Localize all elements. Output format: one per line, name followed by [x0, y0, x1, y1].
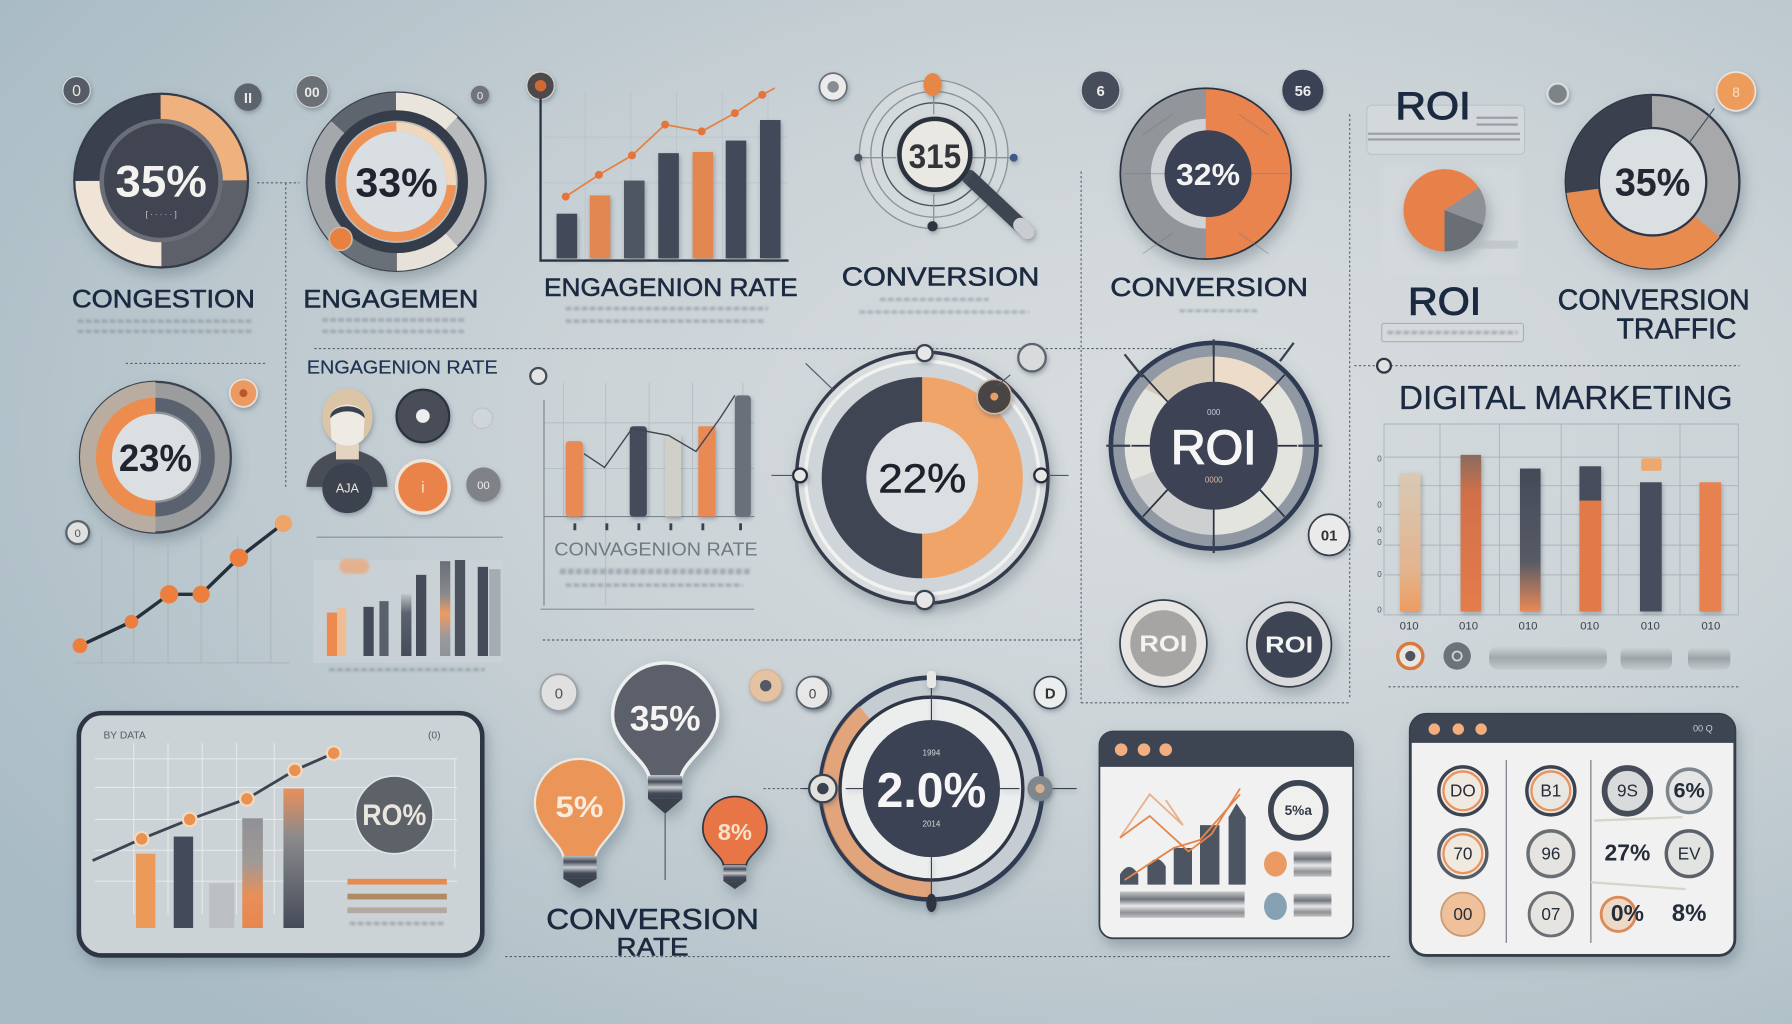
- label: CONVERSION (donut): CONVERSION: [1110, 272, 1308, 302]
- y labels: 0: [1377, 606, 1382, 615]
- markers: [819, 73, 1018, 231]
- heading: ENGAGENION RATE small: ENGAGENION RATE: [307, 357, 498, 378]
- fuzzy caption: [329, 668, 485, 671]
- token icons: engagement: 0: [477, 90, 483, 102]
- trend lines: [1120, 789, 1240, 880]
- window dots: [1429, 723, 1487, 735]
- badge: ROI light: [1120, 600, 1207, 687]
- label: CONVERSION TRAFFIC: CONVERSION: [1558, 285, 1750, 317]
- icon: bulb small: [703, 797, 767, 889]
- heading: ROI top: ROI: [1395, 85, 1471, 128]
- fuzzy caption: rate: [566, 309, 768, 321]
- percent circles: 07: [1541, 904, 1560, 924]
- tiny caption bottom: 2014: [923, 819, 941, 828]
- badge: dark: [397, 390, 449, 442]
- person: [306, 389, 387, 487]
- value: 23%: 23%: [119, 437, 192, 479]
- token: orange marker: [230, 379, 257, 407]
- gauge: ROI: [1106, 339, 1322, 553]
- label: CONVERSION RATE: CONVERSION: [546, 904, 759, 936]
- label: ENGAGENION RATE: ENGAGENION RATE: [544, 274, 798, 302]
- tiny caption bottom: 0000: [1205, 475, 1223, 484]
- label: CONVERSION RATE: [546, 904, 759, 961]
- bars: [1400, 455, 1721, 611]
- gauge pins: [1106, 339, 1322, 553]
- window dots: [1115, 743, 1172, 756]
- x labels: 010: [1400, 621, 1419, 633]
- fuzzy caption: donut conversion: [1179, 310, 1257, 312]
- legend row: [1264, 851, 1331, 920]
- gauge donut: 22%: [771, 344, 1069, 609]
- points: [73, 515, 292, 653]
- percent circles: 00: [1453, 904, 1472, 924]
- fuzzy caption: engagement: [322, 320, 466, 331]
- badge: small token: 01: [1321, 529, 1337, 545]
- token icons: conversion: 56: [1295, 84, 1311, 100]
- value: 35%: 35%: [630, 698, 701, 738]
- legend bars: [347, 879, 447, 913]
- gray band: [1120, 891, 1245, 918]
- badge: ROI dark: ROI: [1265, 632, 1313, 658]
- grid: [95, 743, 457, 914]
- value badge: [355, 776, 433, 854]
- percent circles: 9S: [1617, 781, 1638, 801]
- token icons: conversion: [1081, 70, 1323, 111]
- label: CONVAGENION RATE: CONVAGENION RATE: [554, 538, 758, 559]
- y labels: 0: [1377, 526, 1382, 535]
- gauge markers: D: [1045, 686, 1056, 702]
- orange knob: [329, 227, 352, 250]
- trend line: [562, 88, 775, 201]
- x labels: 010: [1641, 621, 1660, 633]
- donut: conversion 32%: [1121, 89, 1290, 258]
- x labels: 010: [1518, 621, 1538, 633]
- fuzzy caption: conversion: [859, 299, 1029, 312]
- window: percent grid: [1410, 714, 1735, 955]
- trend line: [93, 746, 341, 861]
- y labels: 0: [1377, 500, 1382, 509]
- icon: person with badges: [306, 389, 501, 513]
- icon: bulb 5%: [535, 759, 624, 888]
- tokens: bulbs row: [541, 670, 831, 711]
- percent circles: 8%: [1672, 900, 1706, 927]
- small text left: BY DATA: [103, 730, 146, 741]
- value: 32%: 32%: [1176, 157, 1240, 192]
- token: gray marker: 0: [75, 528, 81, 540]
- backdrop: [1383, 166, 1520, 274]
- value: 2.0%: 2.0%: [877, 764, 986, 818]
- token: chart marker: [527, 72, 554, 99]
- percent circles: B1: [1540, 781, 1561, 801]
- badge: small token: [1309, 514, 1350, 555]
- fuzzy caption: [560, 571, 752, 585]
- bar chart: digital marketing: [1377, 424, 1738, 633]
- y labels: [1377, 455, 1382, 615]
- chart: small bar cluster: [313, 559, 503, 670]
- value: 315: 315: [909, 138, 961, 176]
- icon: person with badges: i: [421, 480, 425, 497]
- handle: [969, 177, 1027, 232]
- value: 8%: 8%: [718, 819, 752, 845]
- percent circles: DO: [1450, 781, 1476, 801]
- token icons: congestion: [63, 77, 262, 111]
- x labels: 010: [1580, 621, 1599, 633]
- token icons: engagement: [296, 75, 489, 107]
- gauge: 2.0%: [797, 671, 1077, 912]
- token: digital marketing marker: [1377, 359, 1391, 373]
- icon: person with badges: 00: [477, 480, 490, 492]
- small text right: (0): [428, 730, 441, 741]
- bars: [1120, 803, 1246, 885]
- connector lines: [126, 114, 1739, 957]
- bars: [566, 395, 751, 517]
- gauge markers: [797, 671, 1077, 912]
- line chart: rising trend: [73, 515, 292, 663]
- gauge markers: 0: [809, 686, 817, 701]
- line: [584, 395, 735, 467]
- token: small gray: [1547, 83, 1568, 104]
- value: 22%: 22%: [878, 456, 966, 502]
- panel: tablet chart: [79, 713, 482, 955]
- donut: 23%: [80, 382, 231, 533]
- legend controls: [1398, 642, 1730, 670]
- token: [530, 368, 546, 384]
- value: 35%: 35%: [1615, 161, 1690, 204]
- x labels: 010: [1459, 621, 1478, 633]
- label: ENGAGEMEN: ENGAGEMEN: [303, 285, 478, 313]
- connector and token: [1689, 72, 1755, 143]
- label: CONGESTION: CONGESTION: [72, 285, 255, 313]
- percent circles: 70: [1453, 843, 1472, 863]
- caption box: [1382, 323, 1523, 342]
- tiny caption top: 1994: [923, 748, 941, 757]
- percent circles: [1439, 767, 1712, 936]
- value: 5%a: 5%a: [1285, 803, 1312, 818]
- donut: congestion 35%: [74, 94, 248, 267]
- heading: ROI bottom: ROI: [1408, 280, 1481, 323]
- label: CONVERSION (magnifier): CONVERSION: [842, 262, 1039, 292]
- tiny caption: [ · · · · · ]: [146, 210, 177, 219]
- tokens: bulbs row: 0: [555, 686, 563, 702]
- tag: [1641, 458, 1662, 471]
- tiny header icon: 00 Q: [1693, 723, 1713, 733]
- percent circles: 6%: [1673, 778, 1705, 803]
- lens: [899, 119, 970, 190]
- y labels: 0: [1377, 538, 1382, 547]
- badge: ROI light: ROI: [1139, 630, 1187, 656]
- pie chart: [1403, 169, 1486, 251]
- x labels: [1400, 621, 1720, 633]
- token icons: engagement: 00: [304, 85, 320, 100]
- token icons: congestion: II: [244, 91, 252, 107]
- gauge markers: [793, 344, 1048, 609]
- y labels: 0: [1377, 455, 1382, 464]
- token: gray marker: [66, 521, 89, 544]
- badge: person: [322, 463, 373, 513]
- value: R0%: RO%: [362, 799, 426, 832]
- label: CONVERSION TRAFFIC: [1558, 285, 1750, 345]
- donut: engagement 33%: [307, 93, 486, 271]
- icon: bulb 35%: [613, 663, 718, 880]
- badge: orange: [397, 461, 449, 513]
- bars: [136, 789, 304, 928]
- tokens: bulbs row: 0: [811, 686, 819, 702]
- window: line and bars: [1099, 731, 1353, 938]
- mini donut: [1271, 783, 1326, 838]
- token icons: conversion: 6: [1096, 84, 1105, 100]
- fuzzy caption: congestion: [78, 321, 251, 331]
- donut: conversion traffic 35%: [1566, 72, 1755, 269]
- tiny caption top: 000: [1207, 408, 1221, 417]
- badge: faint: [472, 408, 493, 429]
- token icons: congestion: 0: [72, 83, 81, 100]
- connector and token: 8: [1732, 85, 1740, 100]
- chart: engagement rate bars and trend: [527, 72, 789, 261]
- chart: conversion rate: [530, 368, 758, 606]
- icon: person with badges: AJA: [336, 482, 360, 496]
- token: tag: [339, 559, 369, 574]
- y labels: 0: [1377, 570, 1382, 579]
- note box: [1367, 105, 1525, 154]
- value: 33%: 33%: [355, 160, 438, 206]
- x labels: 010: [1701, 621, 1720, 633]
- value: 5%: 5%: [555, 791, 603, 824]
- panel: ROI with pie: [1367, 85, 1525, 342]
- percent circles: 27%: [1605, 840, 1650, 866]
- bars: [557, 120, 781, 258]
- label: CONVERSION RATE: RATE: [617, 933, 689, 961]
- label: CONVERSION TRAFFIC: TRAFFIC: [1617, 313, 1737, 345]
- badge: ROI dark: [1247, 602, 1331, 687]
- percent circles: 96: [1541, 843, 1560, 863]
- percent circles: 0%: [1611, 900, 1644, 926]
- heading: DIGITAL MARKETING: DIGITAL MARKETING: [1399, 380, 1733, 417]
- magnifier with 315: [819, 73, 1027, 232]
- value: 35%: 35%: [115, 158, 207, 207]
- tick markers: [575, 523, 741, 530]
- badge: gray: [466, 467, 501, 502]
- percent circles: EV: [1678, 843, 1701, 863]
- value: ROI: ROI: [1171, 422, 1257, 475]
